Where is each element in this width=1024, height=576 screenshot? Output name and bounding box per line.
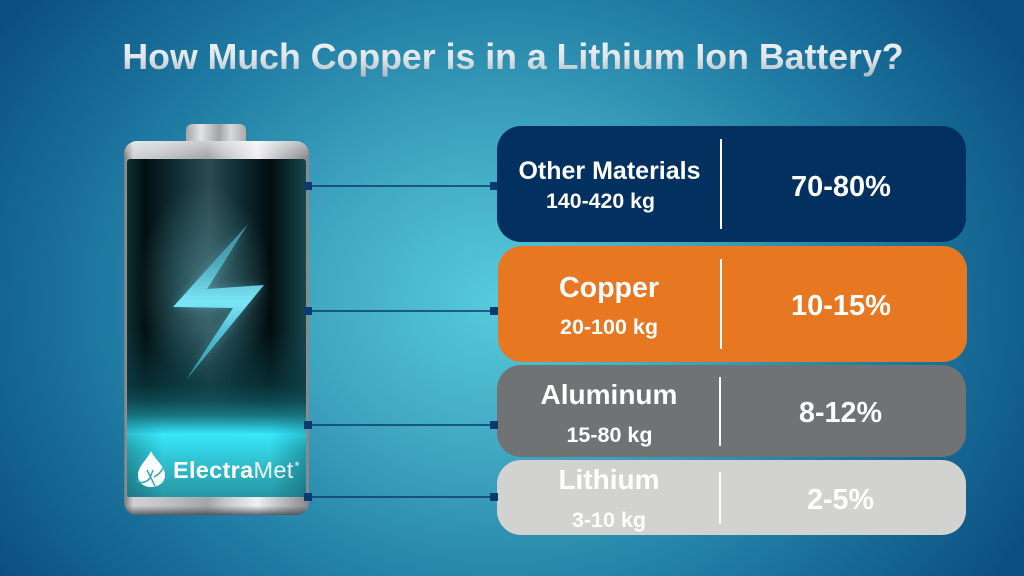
logo wordmark: ElectraMet — [173, 457, 294, 483]
battery body — [127, 159, 306, 497]
connector: copper — [304, 307, 498, 315]
percent: copper: 10-15% — [791, 290, 891, 322]
weight: copper: 20-100 kg — [560, 315, 658, 339]
connector: other materials — [304, 182, 498, 190]
battery terminal — [186, 124, 246, 148]
label: aluminum: Aluminum — [541, 379, 677, 410]
logo: ElectraMet — [136, 451, 300, 487]
label: other materials: Other Materials — [518, 157, 701, 185]
percent: aluminum: 8-12% — [799, 397, 882, 429]
icon: lightning bolt — [173, 224, 264, 380]
connector: aluminum — [304, 421, 498, 429]
battery casing — [124, 141, 309, 515]
label: lithium: Lithium — [558, 464, 660, 495]
logo registered mark: ® — [295, 461, 300, 468]
title: How Much Copper is in a Lithium Ion Battery? — [122, 37, 904, 77]
charge level liquid — [127, 385, 306, 497]
percent: other materials: 70-80% — [791, 171, 891, 203]
logo drop icon — [136, 451, 165, 487]
panel: aluminum — [497, 365, 966, 457]
label: copper: Copper — [559, 272, 659, 304]
weight: lithium: 3-10 kg — [572, 508, 646, 532]
panel: copper — [498, 246, 967, 362]
weight: other materials: 140-420 kg — [546, 189, 655, 213]
connector lines — [304, 182, 498, 501]
percent: lithium: 2-5% — [807, 484, 874, 516]
panel: other materials — [497, 126, 966, 242]
connector: lithium — [304, 493, 498, 501]
icon: battery — [124, 124, 309, 515]
weight: aluminum: 15-80 kg — [566, 423, 653, 447]
panel: lithium — [497, 460, 966, 535]
